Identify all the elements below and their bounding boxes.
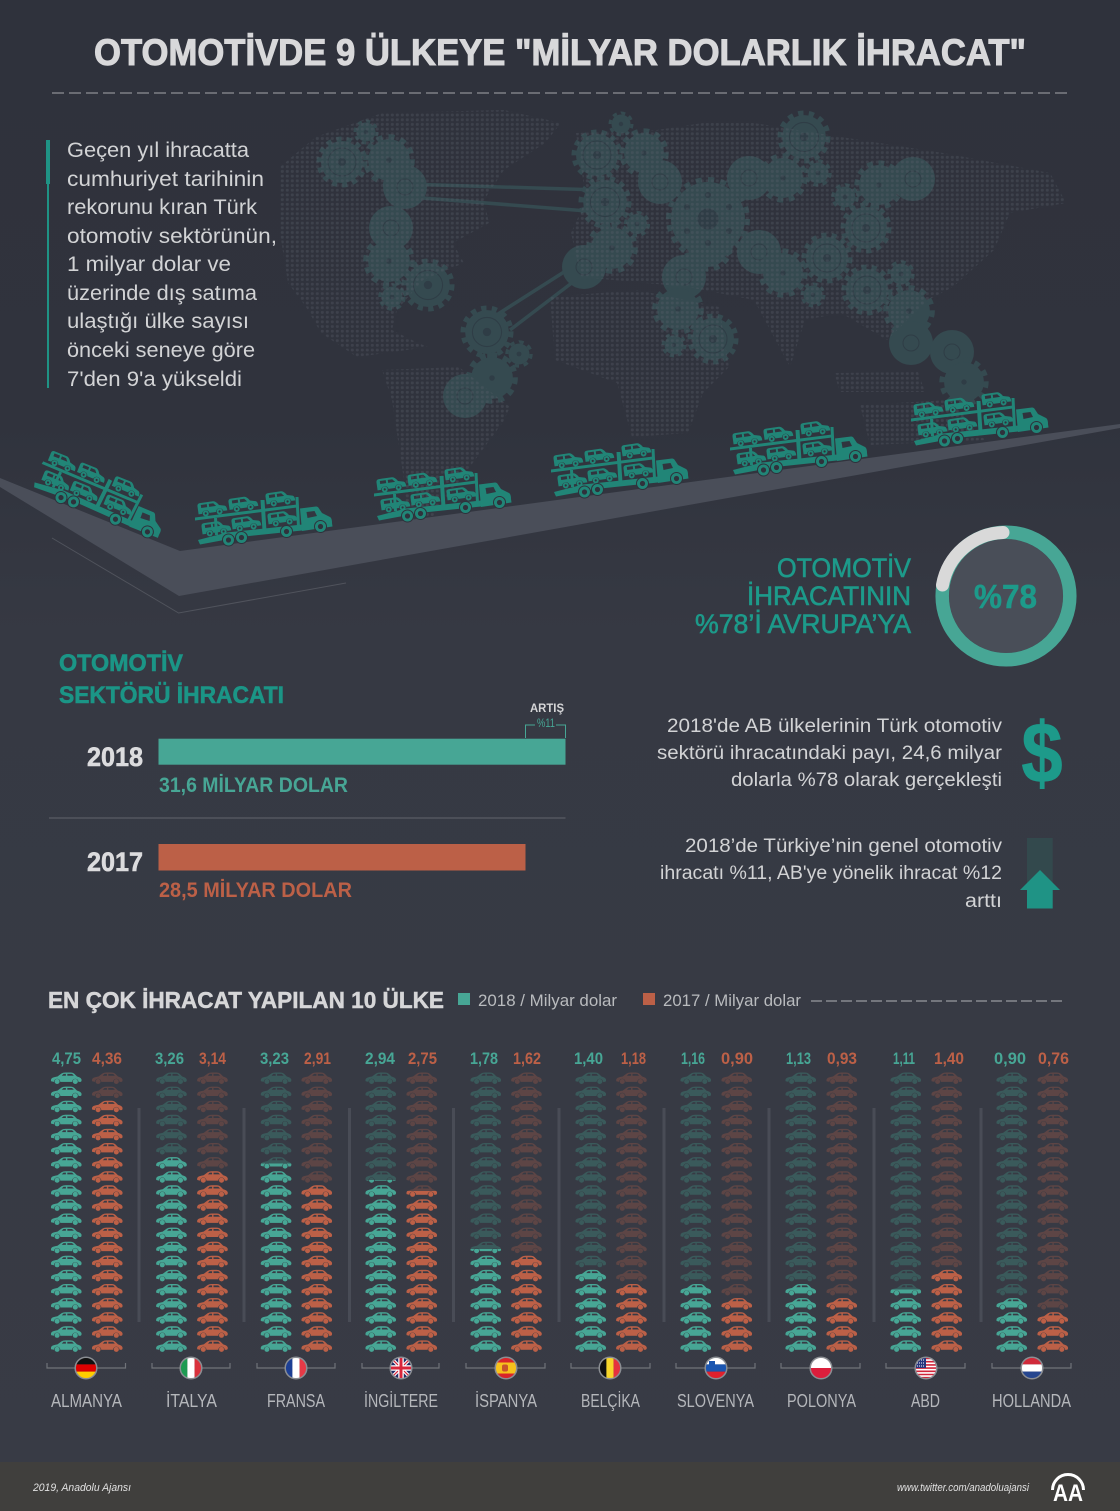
bar: 2017: 28,5 MİLYAR DOLAR <box>159 879 352 902</box>
country: İspanya: 1,78 <box>470 1050 498 1068</box>
intro text block <box>46 139 277 391</box>
country: Almanya: 4,75 <box>52 1050 81 1068</box>
country: İngiltere: 2,75 <box>408 1050 437 1068</box>
text: EU share <box>657 716 1003 791</box>
intro text block: ulaştığı ülke sayısı <box>67 310 249 333</box>
country: İspanya <box>466 1050 545 1411</box>
country: İspanya: 1,62 <box>513 1050 541 1068</box>
country: Fransa: 3,23 <box>260 1050 289 1068</box>
country: Belçika: 1,40 <box>574 1050 603 1068</box>
Europe share heading <box>695 552 911 639</box>
country: Hollanda: 0,76 <box>1038 1050 1069 1068</box>
country: Polonya: 0,93 <box>827 1050 857 1068</box>
country: Slovenya <box>676 1050 755 1411</box>
text: export growth: arttı <box>965 891 1002 912</box>
bar: 2018: 2018 <box>87 742 143 772</box>
country: Fransa: FRANSA <box>267 1391 325 1411</box>
country: Hollanda: 0,90 <box>994 1050 1026 1068</box>
legend <box>458 991 1063 1010</box>
country: Fransa <box>257 1050 335 1411</box>
country: Polonya: 1,13 <box>786 1050 811 1068</box>
country: ABD: 1,11 <box>893 1050 915 1068</box>
bar chart heading: SEKTÖRÜ İHRACATI <box>59 682 284 709</box>
intro text block: cumhuriyet tarihinin <box>67 168 264 191</box>
legend: 2017 / Milyar dolar <box>663 991 801 1010</box>
road with trucks <box>0 390 1120 613</box>
intro text block: otomotiv sektörünün, <box>67 225 277 248</box>
text: export growth <box>660 836 1003 912</box>
country: Hollanda <box>992 1050 1071 1411</box>
icon: dollar sign: $ <box>1022 706 1062 801</box>
Europe share heading: İHRACATININ <box>747 580 911 611</box>
footer <box>0 1462 1120 1511</box>
title: OTOMOTİVDE 9 ÜLKEYE "MİLYAR DOLARLIK İHRACAT" <box>94 32 1026 73</box>
bar: 2018: 31,6 MİLYAR DOLAR <box>159 774 348 797</box>
country: İtalya: 3,14 <box>199 1050 227 1068</box>
country: İngiltere <box>362 1050 439 1411</box>
intro text block: Geçen yıl ihracatta <box>67 139 249 162</box>
world map with gears <box>280 110 1066 545</box>
country: Polonya <box>781 1050 860 1411</box>
country: İngiltere: İNGİLTERE <box>364 1391 438 1411</box>
country: İtalya: İTALYA <box>166 1391 217 1411</box>
footer: 2019, Anadolu Ajansı <box>32 1482 131 1494</box>
Europe share heading: OTOMOTİV <box>777 552 911 583</box>
legend: 2018 / Milyar dolar <box>478 991 617 1010</box>
intro text block: üzerinde dış satıma <box>67 282 257 305</box>
text: export growth: ihracatı %11, AB'ye yönelik ihracat %12 <box>660 863 1002 884</box>
bar chart heading: OTOMOTİV <box>59 650 183 677</box>
country: Almanya: ALMANYA <box>51 1391 122 1411</box>
country: İtalya <box>152 1050 230 1411</box>
footer: www.twitter.com/anadoluajansi <box>897 1482 1029 1494</box>
country: ABD: 1,40 <box>934 1050 964 1068</box>
text: EU share: sektörü ihracatındaki payı, 24,6 milyar <box>657 743 1003 764</box>
country: Belçika <box>571 1050 650 1411</box>
country: İngiltere: 2,94 <box>365 1050 396 1068</box>
country: Belçika: 1,18 <box>621 1050 646 1068</box>
country: Fransa: 2,91 <box>304 1050 331 1068</box>
country: Belçika: BELÇİKA <box>581 1391 640 1411</box>
bar: 2017: 2017 <box>87 847 143 877</box>
country: İtalya: 3,26 <box>155 1050 184 1068</box>
donut chart 78 percent: %78 <box>974 578 1037 615</box>
Europe share heading: %78’İ AVRUPA’YA <box>695 608 911 639</box>
bar: 2017 <box>87 844 526 902</box>
country: Almanya: 4,36 <box>92 1050 122 1068</box>
country: ABD: ABD <box>911 1391 940 1411</box>
intro text block: 7'den 9'a yükseldi <box>67 368 242 391</box>
bar chart heading <box>59 650 284 709</box>
increase bracket: ARTIŞ <box>530 701 564 715</box>
section heading: EN ÇOK İHRACAT YAPILAN 10 ÜLKE <box>48 987 444 1013</box>
text: export growth: 2018’de Türkiye’nin genel otomotiv <box>685 836 1003 857</box>
country: ABD <box>886 1050 965 1411</box>
bar: 2018 <box>87 739 566 797</box>
text: EU share: dolarla %78 olarak gerçekleşti <box>731 770 1002 791</box>
increase bracket: %11 <box>537 718 555 730</box>
intro text block: 1 milyar dolar ve <box>67 253 231 276</box>
country: Slovenya: 1,16 <box>681 1050 705 1068</box>
intro text block: rekorunu kıran Türk <box>67 196 258 219</box>
country: Polonya: POLONYA <box>787 1391 856 1411</box>
footer: AA <box>1053 1480 1083 1507</box>
country: İspanya: İSPANYA <box>475 1391 537 1411</box>
country: Slovenya: 0,90 <box>721 1050 753 1068</box>
country: Slovenya: SLOVENYA <box>677 1391 754 1411</box>
text: EU share: 2018'de AB ülkelerinin Türk otomotiv <box>667 716 1003 737</box>
intro text block: önceki seneye göre <box>67 339 255 362</box>
increase bracket <box>526 701 566 738</box>
country: Almanya <box>47 1050 126 1411</box>
icon: up arrow <box>1020 838 1060 908</box>
country: Hollanda: HOLLANDA <box>992 1391 1071 1411</box>
donut chart 78 percent <box>942 532 1070 660</box>
